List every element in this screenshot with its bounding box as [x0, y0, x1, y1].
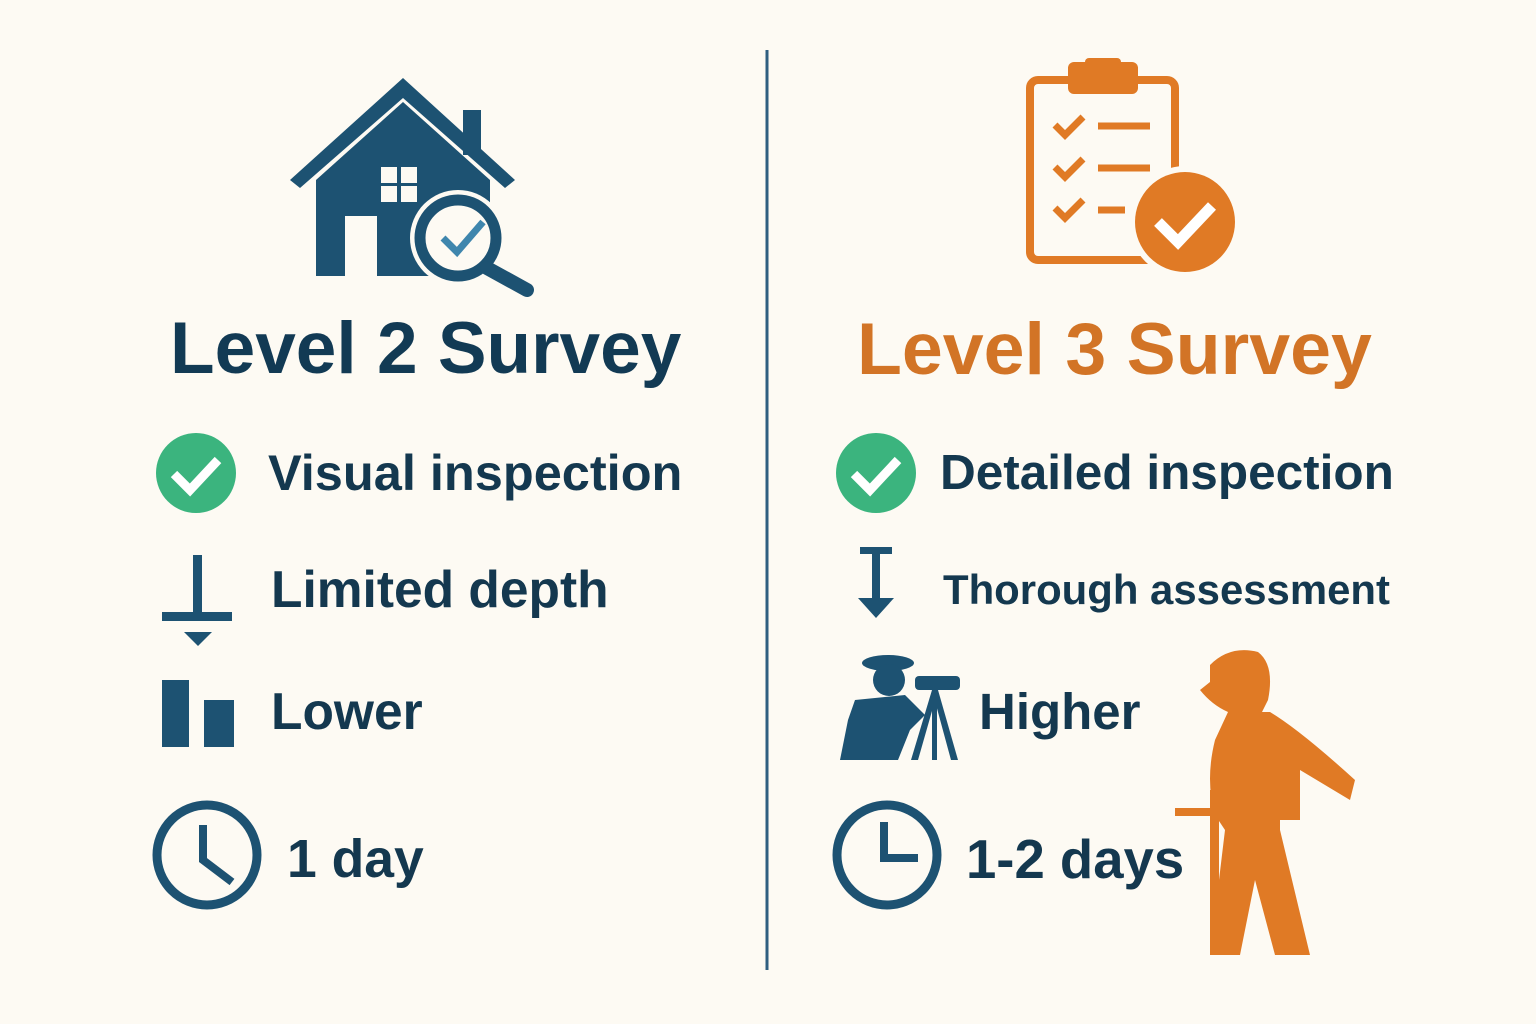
text: Detailed inspection: Detailed inspection [940, 445, 1394, 500]
text: Thorough assessment: Thorough assessment [943, 566, 1390, 613]
text: 1-2 days: 1-2 days [966, 829, 1184, 890]
title: Level 3 Survey: Level 3 Survey [857, 307, 1372, 390]
icon: green check right [836, 433, 916, 513]
icon: down arrow [858, 547, 894, 618]
icon: clock right [837, 805, 937, 905]
text: 1 day: 1 day [287, 830, 424, 889]
illustration: elderly man with cane [1175, 650, 1355, 955]
icon: house with magnifier [290, 78, 527, 290]
text: Higher: Higher [979, 683, 1141, 740]
text: Visual inspection: Visual inspection [268, 444, 682, 501]
icon: clipboard with check [1030, 58, 1241, 278]
icon: surveyor [840, 655, 960, 760]
icon: limited depth [162, 555, 232, 646]
icon: bars lower [162, 680, 234, 747]
text: Lower: Lower [271, 682, 423, 740]
title: Level 2 Survey: Level 2 Survey [170, 308, 681, 389]
icon: green check left [156, 433, 236, 513]
icon: clock left [157, 805, 257, 905]
text: Limited depth: Limited depth [271, 560, 609, 618]
